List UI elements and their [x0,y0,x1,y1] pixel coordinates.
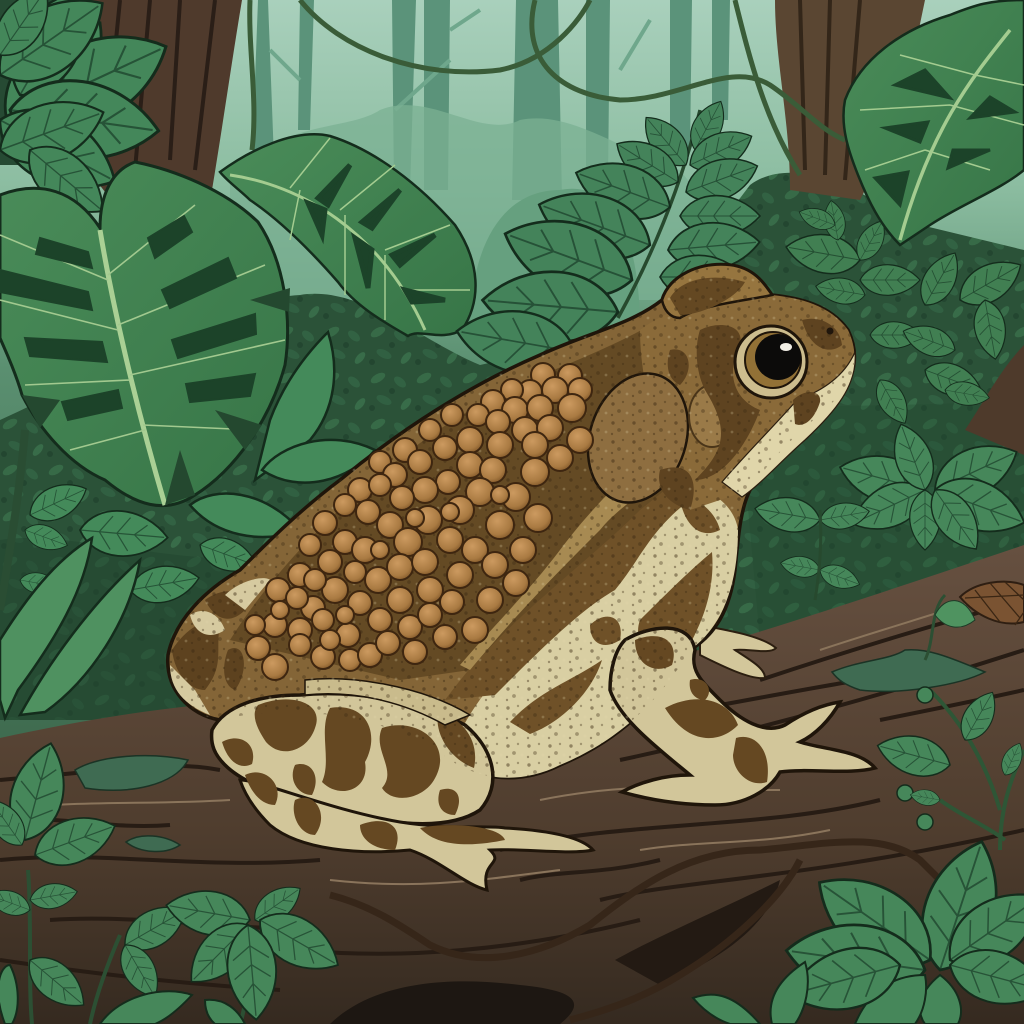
strap leaves: lower left [0,538,140,718]
toad: pale flank and belly [450,490,738,778]
foreground plant: bottom left [0,737,349,1024]
toad: parotoid gland [572,360,704,516]
arrow-shaped leaves: centre left [0,332,375,610]
tree trunks [85,0,1024,455]
toad: hind thigh [212,694,493,824]
toad: body [168,265,854,778]
acorn and seedling [925,582,1024,660]
toad: upper back shading [230,320,690,680]
toad: head [640,294,854,510]
fern frond [452,95,764,382]
toad: dark head patches [659,319,842,510]
toad: nostril [826,328,834,334]
toad: lower hind leg and foot [240,780,593,890]
fronds: top left [0,0,182,230]
toad: dark flank markings [445,470,720,734]
moss patches [75,650,985,851]
toad: eye [735,326,807,398]
toad: lower leg blotches [245,772,505,850]
toad: front leg [610,628,875,805]
toad: rear front foot [700,625,776,678]
toad: tan streak under eggs [460,445,668,670]
toad: front leg blotches [635,636,768,783]
small leaf cluster: right [783,199,1024,430]
toad: tympanum [689,385,735,447]
toad: rump blotches [172,591,246,690]
monstera leaf: top right [843,0,1024,245]
toad: head crest bump [662,265,772,318]
fallen log [0,545,1024,1024]
toad: skin speckles [168,265,854,778]
toad [168,265,875,890]
monstera leaf: middle [220,134,476,336]
toad: upper thigh strip [305,679,470,725]
toad: throat [722,352,855,497]
hanging vines [250,0,845,175]
star leaf cluster: right [752,418,1024,600]
toad: eggs on back [245,363,593,680]
foreground plant: bottom right [693,685,1024,1024]
dark undergrowth [0,173,1024,720]
monstera leaf: large left [0,162,290,506]
toad: thigh blotches [222,699,475,815]
